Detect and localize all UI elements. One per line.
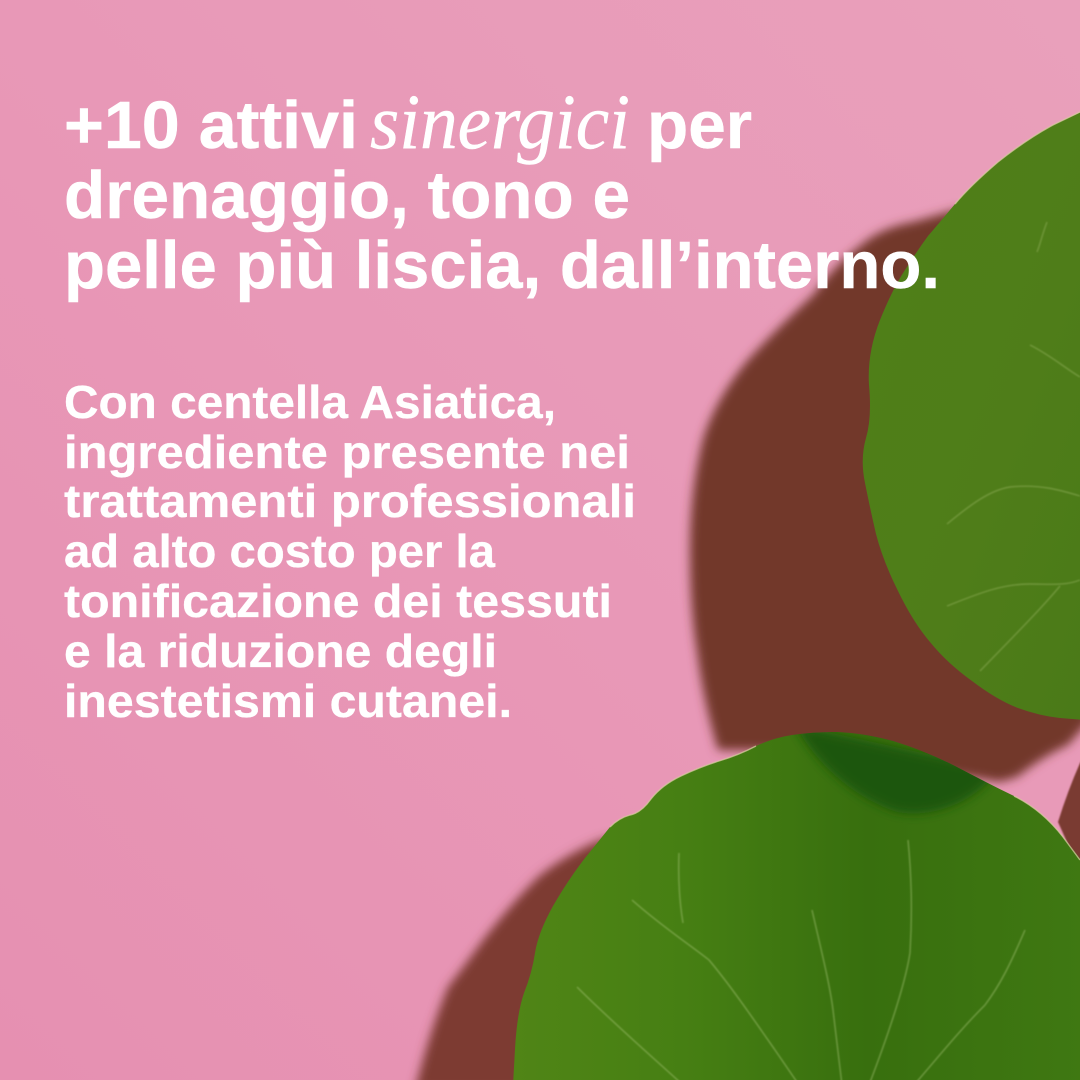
shadow strip at right edge — [1058, 745, 1080, 880]
heading — [64, 78, 940, 303]
lower leaf pale edge — [610, 746, 1080, 860]
heading: pelle più liscia, dall’interno. — [64, 228, 940, 303]
body text: ingrediente presente nei — [64, 426, 630, 478]
heading: per — [647, 88, 752, 163]
heading: sinergici — [370, 78, 630, 165]
lower leaf — [513, 725, 1080, 1080]
body text: tonificazione dei tessuti — [64, 575, 612, 627]
body text: e la riduzione degli — [64, 625, 497, 677]
upper leaf veins — [947, 222, 1080, 671]
shaded top of lower leaf — [795, 725, 1000, 813]
shadow of lower leaf — [415, 830, 640, 1080]
lower leaf veins — [577, 840, 1025, 1080]
body text: inestetismi cutanei. — [64, 675, 512, 727]
body text: trattamenti professionali — [64, 475, 636, 527]
body text: ad alto costo per la — [64, 525, 495, 577]
heading: +10 attivi — [64, 88, 358, 163]
upper leaf — [863, 110, 1080, 720]
shadow of upper leaf — [690, 210, 1080, 782]
body text: Con centella Asiatica, — [64, 376, 556, 428]
body text — [64, 376, 636, 727]
heading: drenaggio, tono e — [64, 158, 630, 233]
upper leaf pale edge — [955, 112, 1080, 204]
